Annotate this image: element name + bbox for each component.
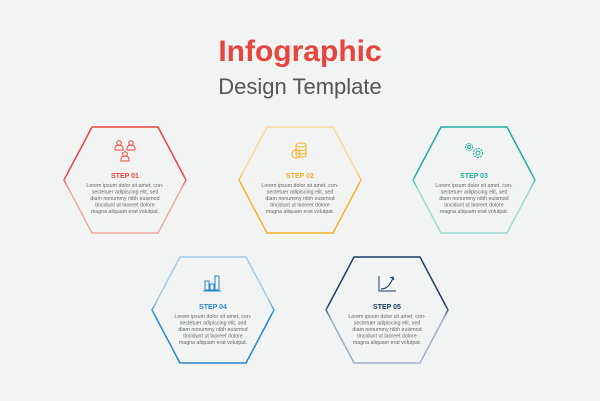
icon: gears — [466, 144, 482, 158]
text block: diam nonummy nibh euismod — [265, 196, 335, 202]
text block: diam nonummy nibh euismod — [178, 327, 248, 333]
text block: magna aliquam erat volutpat. — [91, 209, 159, 215]
heading: STEP 05 — [373, 304, 401, 311]
text block: diam nonummy nibh euismod — [352, 327, 422, 333]
text block: Lorem ipsum dolor sit amet, con- — [174, 314, 252, 320]
text block — [435, 183, 513, 215]
text block: sectetuer adipiscing elit, sed — [441, 190, 507, 196]
icon: people — [115, 141, 135, 161]
text block: magna aliquam erat volutpat. — [179, 340, 247, 346]
text block: Lorem ipsum dolor sit amet, con- — [348, 314, 426, 320]
text block — [348, 314, 426, 346]
icon: coins — [292, 143, 306, 158]
text block: sectetuer adipiscing elit, sed — [354, 320, 420, 326]
heading: STEP 03 — [460, 173, 488, 180]
text block: sectetuer adipiscing elit, sed — [180, 320, 246, 326]
text block: tincidunt ut laoreet dolore — [95, 202, 155, 208]
text block: sectetuer adipiscing elit, sed — [92, 190, 158, 196]
text block: tincidunt ut laoreet dolore — [183, 334, 243, 340]
text block: magna aliquam erat volutpat. — [266, 209, 334, 215]
text block — [174, 314, 252, 346]
text block: Lorem ipsum dolor sit amet, con- — [435, 183, 513, 189]
title: Infographic — [218, 35, 382, 68]
heading: STEP 02 — [286, 173, 314, 180]
icon: bar chart — [203, 276, 221, 291]
panel: step 01 — [64, 127, 186, 233]
text block: tincidunt ut laoreet dolore — [270, 202, 330, 208]
text block: tincidunt ut laoreet dolore — [357, 334, 417, 340]
text block — [261, 183, 339, 215]
heading: STEP 04 — [199, 304, 227, 311]
text block: diam nonummy nibh euismod — [439, 196, 509, 202]
panel: step 02 — [239, 127, 361, 233]
text block: Lorem ipsum dolor sit amet, con- — [86, 183, 164, 189]
icon: growth chart — [379, 276, 396, 291]
text block: sectetuer adipiscing elit, sed — [267, 190, 333, 196]
text block: tincidunt ut laoreet dolore — [444, 202, 504, 208]
text block: diam nonummy nibh euismod — [90, 196, 160, 202]
panel: step 04 — [152, 257, 274, 363]
subtitle: Design Template — [218, 74, 382, 99]
text block: magna aliquam erat volutpat. — [440, 209, 508, 215]
text block — [86, 183, 164, 215]
text block: magna aliquam erat volutpat. — [353, 340, 421, 346]
panel: step 03 — [413, 127, 535, 233]
panel: step 05 — [326, 257, 448, 363]
heading: STEP 01 — [111, 173, 139, 180]
text block: Lorem ipsum dolor sit amet, con- — [261, 183, 339, 189]
